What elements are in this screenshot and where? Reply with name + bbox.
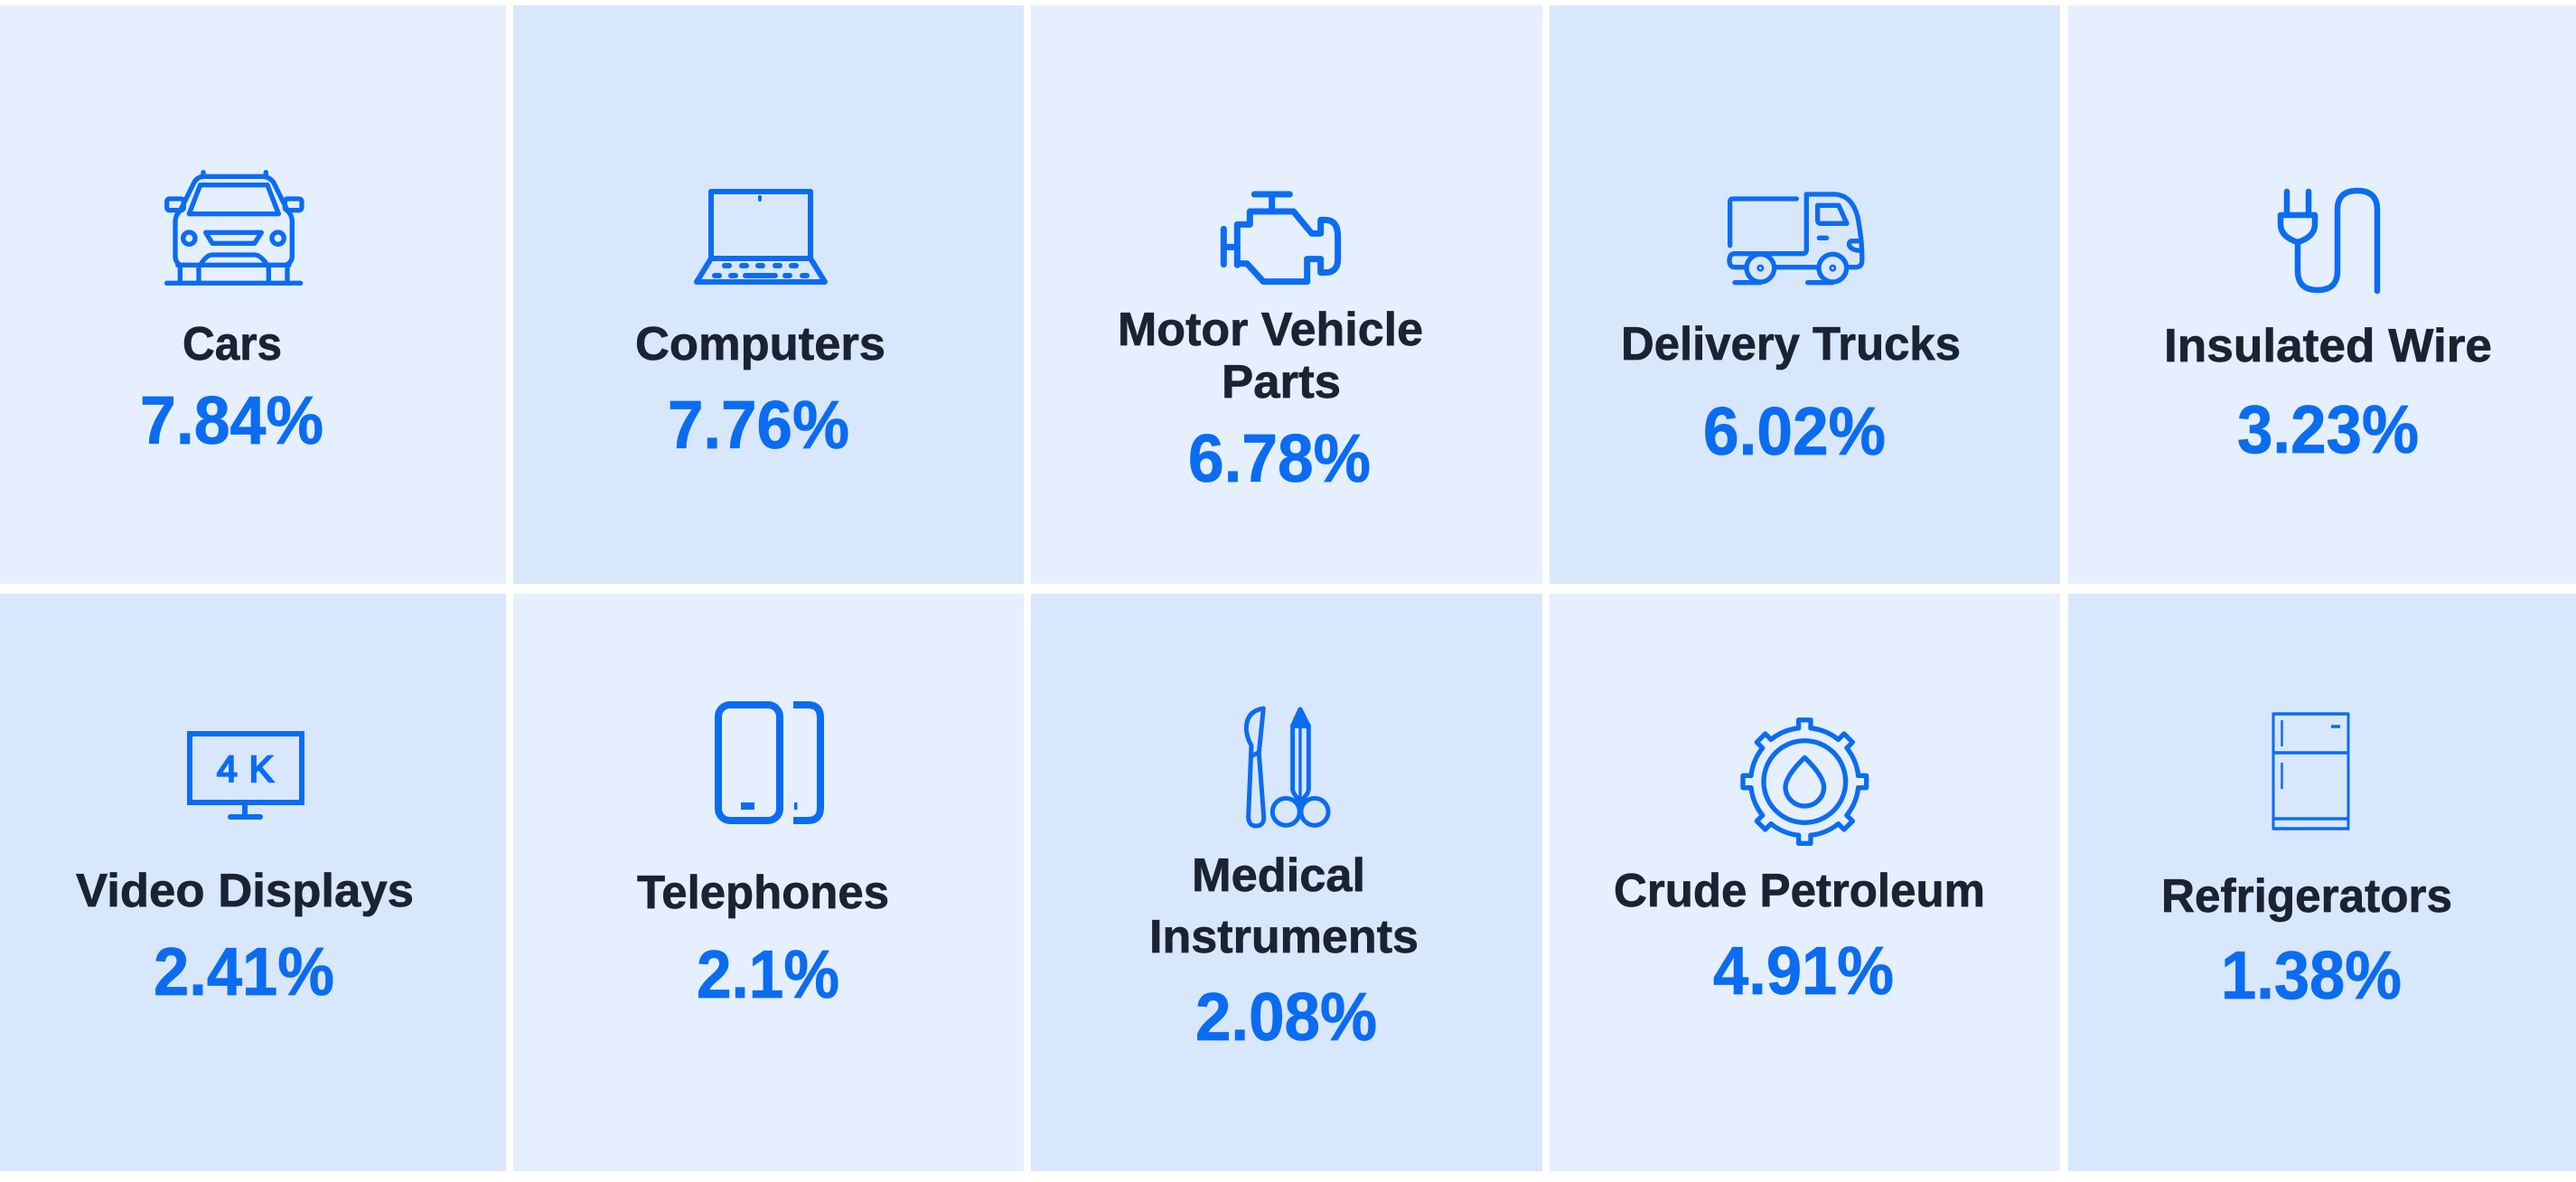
icon: gear with oil drop — [1738, 714, 1872, 849]
icon: 4k monitor: 4 K — [217, 748, 274, 790]
value: cars: 7.84% — [140, 382, 323, 458]
label: video displays: Video Displays — [76, 865, 414, 917]
panel: telephones — [513, 594, 1024, 1171]
panel: motor vehicle parts — [1031, 5, 1542, 584]
panel: refrigerators — [2068, 594, 2576, 1171]
panel: computers — [513, 5, 1024, 584]
panel: insulated wire — [2068, 5, 2576, 584]
panel: video displays — [0, 594, 506, 1171]
value: medical instruments: 2.08% — [1195, 979, 1377, 1055]
value: refrigerators: 1.38% — [2221, 937, 2402, 1013]
label: motor vehicle: Motor Vehicle — [1118, 304, 1423, 356]
label: computers: Computers — [635, 318, 885, 371]
value: motor vehicle parts: 6.78% — [1188, 420, 1371, 496]
value: video displays: 2.41% — [154, 933, 334, 1009]
value: telephones: 2.1% — [697, 936, 839, 1012]
label: cars: Cars — [183, 318, 282, 371]
icon: truck — [1729, 194, 1862, 283]
panel: medical instruments — [1031, 594, 1542, 1171]
panel: cars — [0, 5, 506, 584]
label: telephones: Telephones — [637, 867, 889, 919]
label: insulated wire: Insulated Wire — [2164, 320, 2492, 372]
label: crude petroleum: Crude Petroleum — [1614, 865, 1985, 917]
panel: crude petroleum — [1550, 594, 2060, 1171]
value: computers: 7.76% — [668, 387, 849, 463]
label: medical: Medical — [1192, 849, 1365, 902]
icon: scalpel and scissors — [1246, 708, 1328, 826]
icon: car — [167, 173, 302, 283]
icon: phones — [718, 705, 820, 821]
panel: delivery trucks — [1550, 5, 2060, 584]
value: delivery trucks: 6.02% — [1703, 393, 1886, 469]
icon: laptop — [697, 192, 825, 282]
value: insulated wire: 3.23% — [2237, 391, 2419, 467]
value: crude petroleum: 4.91% — [1713, 933, 1894, 1008]
icon: 4k monitor — [190, 734, 302, 817]
icon: refrigerator — [2273, 714, 2348, 829]
icon: engine — [1223, 194, 1338, 282]
label: delivery trucks: Delivery Trucks — [1621, 318, 1961, 371]
icon: plug and wire — [2281, 191, 2377, 291]
label: refrigerators: Refrigerators — [2161, 870, 2452, 923]
label: instruments: Instruments — [1149, 911, 1419, 963]
label: parts: Parts — [1222, 356, 1341, 408]
